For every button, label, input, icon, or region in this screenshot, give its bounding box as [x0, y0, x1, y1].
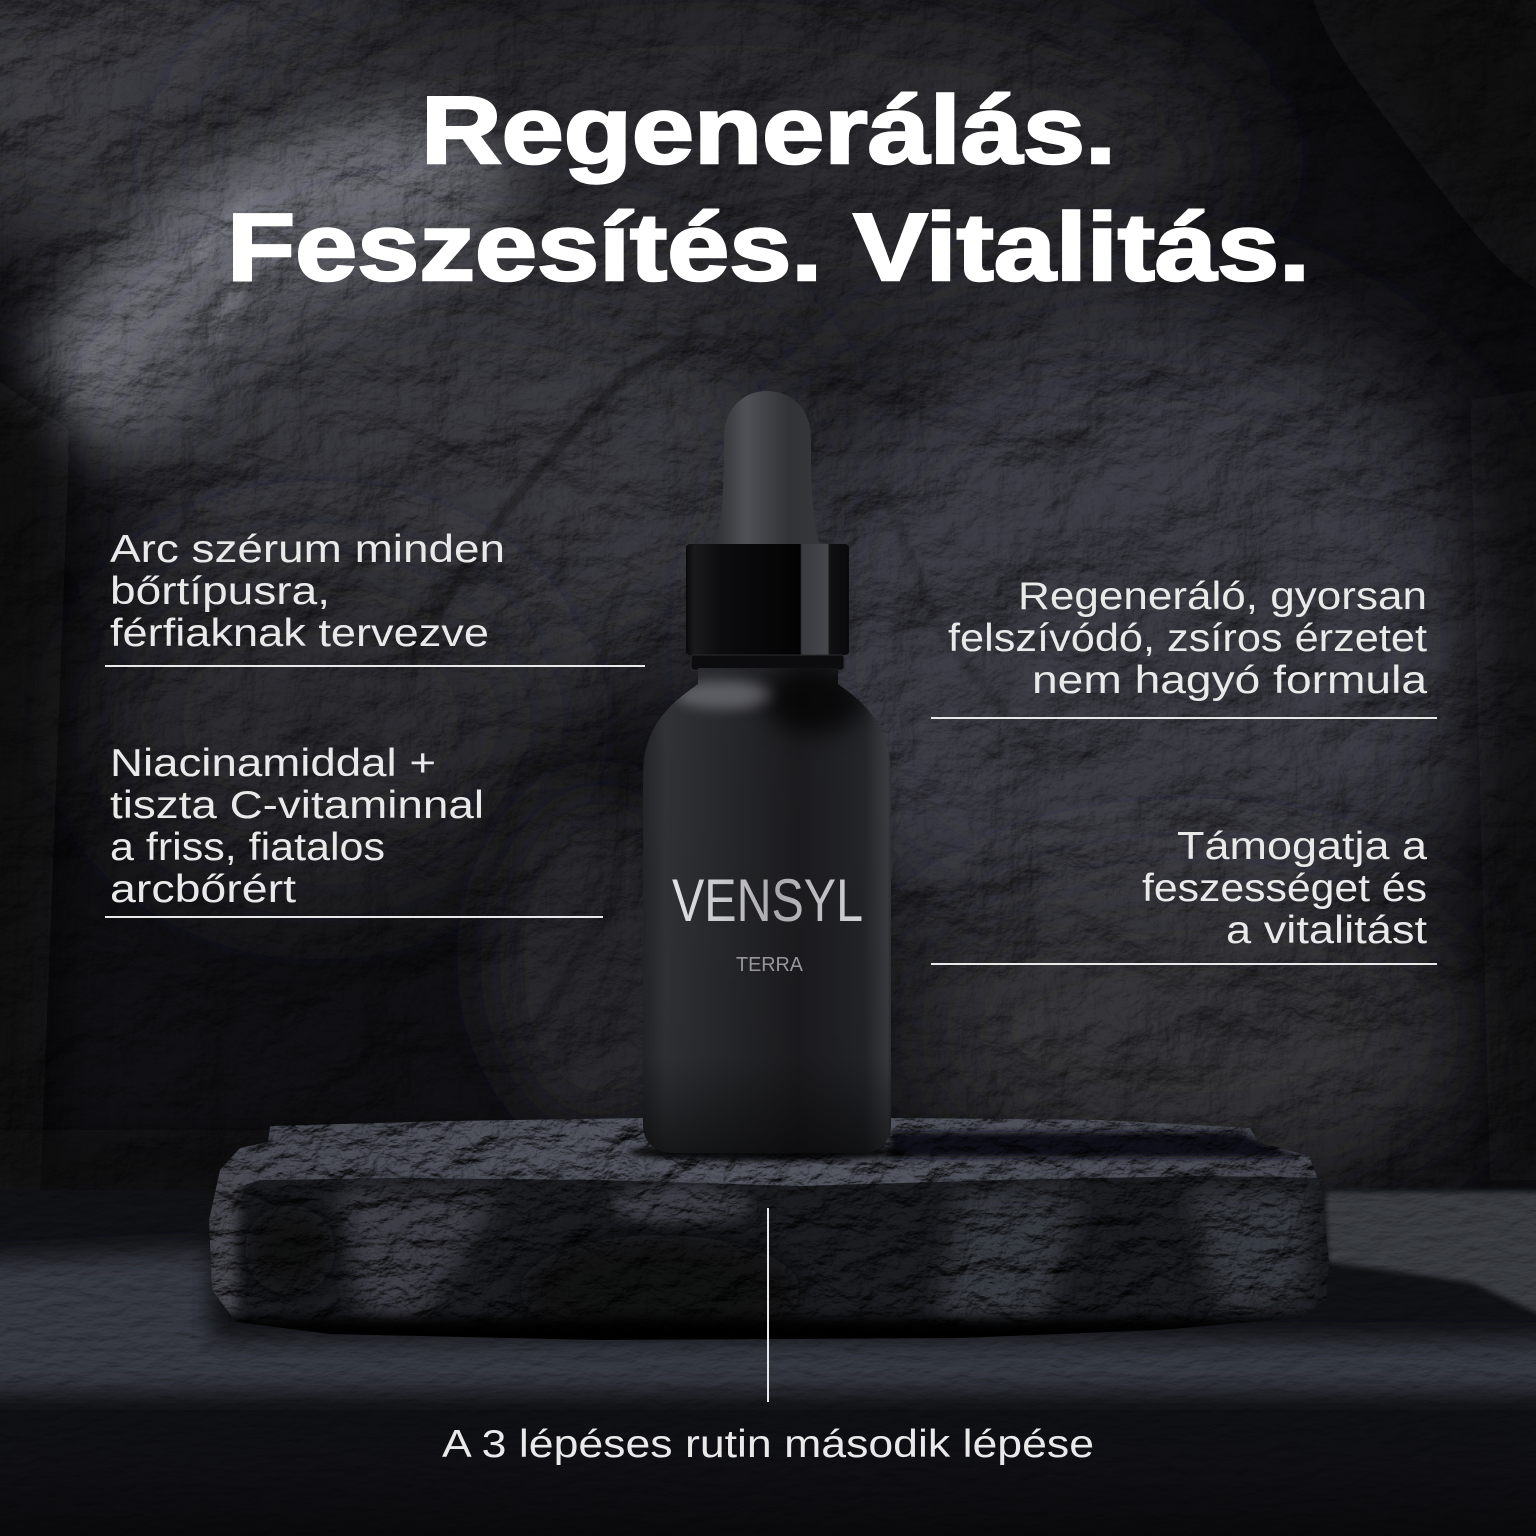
vertical connector line [767, 1208, 769, 1402]
feature: niacinamide and vitamin C: Niacinamiddal + [110, 742, 436, 785]
bottle body [640, 665, 895, 1155]
feature: supports firmness and vitality: a vitalitást [1226, 909, 1427, 952]
feature: supports firmness and vitality: feszességet és [1142, 867, 1427, 910]
feature: regenerating fast-absorbing formula: Regeneráló, gyorsan [1018, 575, 1427, 618]
bottle lower ring [691, 655, 844, 670]
bottle collar [686, 544, 849, 655]
feature: niacinamide and vitamin C: arcbőrért [110, 868, 296, 911]
feature: face serum for all skin types [105, 528, 645, 667]
title: Regenerálás. [421, 77, 1116, 184]
feature: niacinamide and vitamin C [105, 742, 603, 918]
feature: regenerating fast-absorbing formula: felszívódó, zsíros érzetet [948, 617, 1427, 660]
bottle rubber bulb [714, 391, 820, 547]
floor [0, 1190, 1536, 1536]
feature: face serum for all skin types: Arc szérum minden [110, 528, 505, 571]
title [227, 77, 1310, 301]
bottle logo: VENSYL: VENSYL [672, 867, 863, 934]
feature: regenerating fast-absorbing formula [931, 575, 1437, 719]
product: serum dropper bottle [640, 391, 895, 1155]
caption: second step of the routine: A 3 lépéses rutin második lépése [442, 1423, 1094, 1466]
feature: supports firmness and vitality: Támogatja a [1177, 825, 1427, 868]
feature: niacinamide and vitamin C: tiszta C-vitaminnal [110, 784, 484, 827]
title: Feszesítés. Vitalitás. [227, 194, 1310, 301]
feature: face serum for all skin types: bőrtípusra, [110, 570, 330, 613]
feature: niacinamide and vitamin C: a friss, fiatalos [110, 826, 385, 869]
bottle label: TERRA: TERRA [736, 954, 804, 976]
feature: supports firmness and vitality [931, 825, 1437, 965]
feature: regenerating fast-absorbing formula: nem hagyó formula [1032, 659, 1427, 702]
stone slab pedestal [200, 1110, 1340, 1350]
feature: face serum for all skin types: férfiaknak tervezve [110, 612, 489, 655]
